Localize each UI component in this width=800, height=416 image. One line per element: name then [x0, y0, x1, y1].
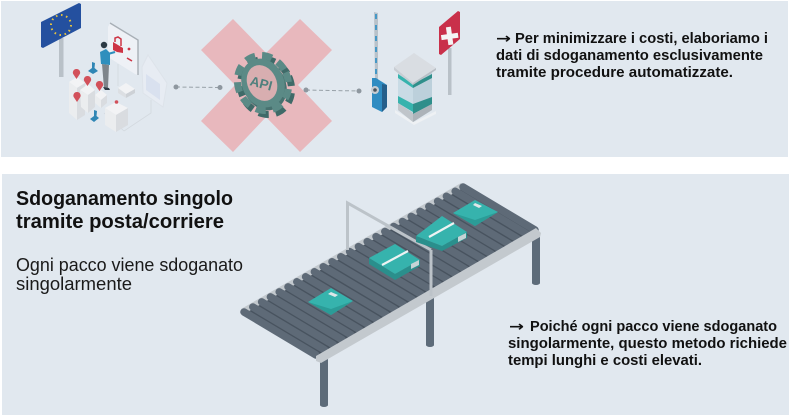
conveyor legs — [320, 233, 540, 407]
text: automated processing note: → — [496, 31, 511, 47]
icon: connection lines — [104, 64, 151, 131]
text: description: Ogni pacco viene sdoganato — [16, 254, 243, 275]
panel: automated processing — [1, 1, 788, 157]
icon: API gear — [229, 47, 300, 123]
gantry frame back post — [348, 203, 431, 250]
text: single clearance note: → — [509, 319, 524, 335]
icon: blue stamps — [88, 62, 99, 122]
icon: house outline — [142, 55, 167, 107]
conveyor front rail — [316, 228, 541, 363]
icon: customs booth — [394, 53, 436, 125]
text: automated processing note: Per minimizzare i costi, elaboriamo i — [515, 31, 768, 47]
text: automated processing note: dati di sdoganamento esclusivamente — [496, 48, 763, 64]
icon: parcel stacks — [69, 77, 135, 132]
parcel 3 — [416, 216, 467, 251]
text: description: singolarmente — [16, 273, 132, 294]
parcel 2 — [369, 244, 420, 280]
conveyor roller bed — [244, 188, 537, 358]
icon: red cross-out — [201, 19, 332, 152]
heading — [16, 187, 233, 233]
illustration: EU customs scene — [41, 3, 167, 132]
text: description — [16, 254, 243, 294]
icon: Swiss flag — [439, 11, 460, 95]
text: automated processing note — [496, 31, 768, 81]
text: automated processing note: tramite procedure automatizzate. — [496, 65, 733, 81]
conveyor rollers — [244, 187, 535, 355]
icon: dashed link left — [174, 84, 222, 90]
icon: EU flag — [41, 3, 81, 77]
parcel 1 — [308, 288, 353, 315]
icon: road barrier — [371, 12, 387, 112]
gantry frame front post — [430, 250, 432, 296]
parcel 4 — [453, 200, 498, 226]
panel: single clearance — [2, 174, 789, 415]
icon: dashed link right — [304, 88, 362, 94]
text: single clearance note: singolarmente, questo metodo richiede — [508, 336, 787, 352]
text: single clearance note: Poiché ogni pacco viene sdoganato — [530, 319, 777, 335]
illustration: conveyor belt — [241, 183, 541, 407]
heading: Sdoganamento singolo — [16, 187, 233, 210]
text: single clearance note — [508, 319, 787, 369]
heading: tramite posta/corriere — [16, 210, 224, 233]
icon: person — [100, 42, 115, 90]
icon: location pins — [73, 69, 118, 104]
icon: API gear: API — [248, 73, 274, 94]
conveyor back rail — [241, 183, 465, 315]
text: single clearance note: tempi lunghi e costi elevati. — [508, 353, 702, 369]
icon: screen with lock — [108, 23, 138, 75]
